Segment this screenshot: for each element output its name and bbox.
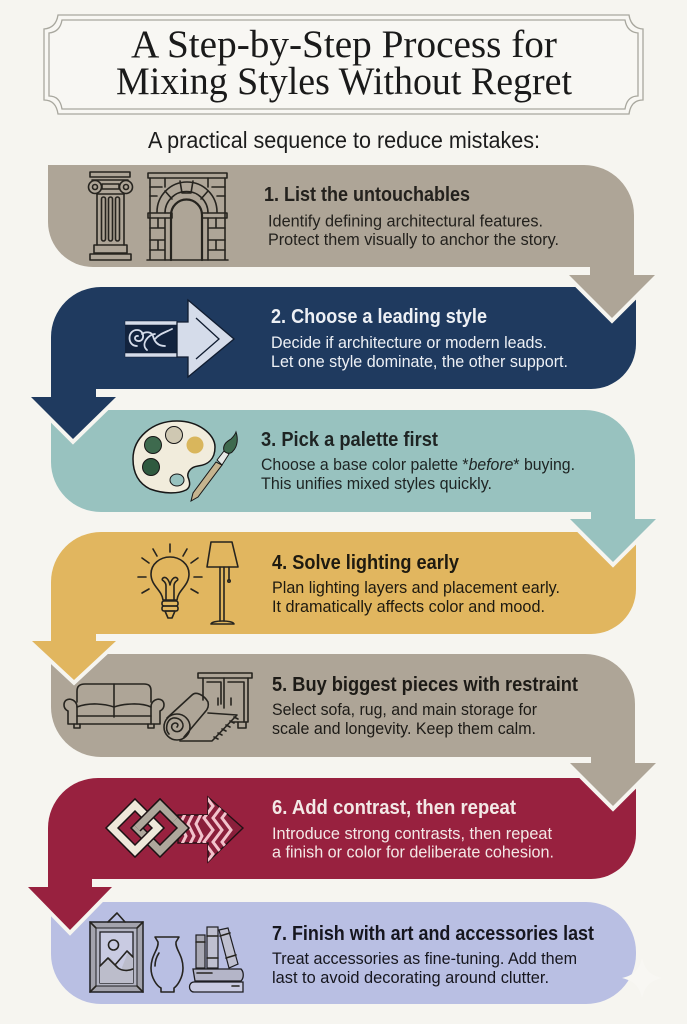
step 4 text: 4. Solve lighting early bbox=[272, 552, 460, 574]
title banner: Mixing Styles Without Regret bbox=[116, 60, 572, 103]
panel: step 4 bbox=[51, 532, 636, 634]
step 6 text: 6. Add contrast, then repeat bbox=[272, 797, 516, 819]
icon: ornament arrow bbox=[125, 300, 234, 377]
icon: wardrobe and rolled rug bbox=[164, 673, 252, 741]
title banner: A Step-by-Step Process for bbox=[131, 23, 557, 66]
step 6 text bbox=[272, 797, 554, 862]
icon: vase bbox=[151, 937, 183, 992]
panel: step 3 bbox=[51, 410, 635, 512]
step 1 text bbox=[264, 184, 559, 249]
step 7 text: 7. Finish with art and accessories last bbox=[272, 923, 594, 945]
step 5 text bbox=[272, 674, 578, 738]
step 7 text bbox=[272, 923, 594, 987]
subtitle: A practical sequence to reduce mistakes: bbox=[148, 127, 540, 153]
step 3 text: Choose a base color palette *before* buying. bbox=[261, 455, 575, 474]
arrow: step 6 to step 7 bbox=[28, 874, 112, 930]
step 7 text: Treat accessories as fine-tuning. Add them bbox=[272, 949, 577, 968]
icon: interlocked diamonds bbox=[112, 805, 183, 851]
icon: light bulb bbox=[138, 544, 202, 618]
arrow: step 3 to step 4 bbox=[570, 506, 656, 562]
step 1 text: Identify defining architectural features. bbox=[268, 212, 543, 230]
step 6 text: Introduce strong contrasts, then repeat bbox=[272, 824, 552, 843]
icon: chevron arrow bbox=[178, 794, 243, 866]
step 5 text: scale and longevity. Keep them calm. bbox=[272, 719, 536, 738]
icon: sofa bbox=[64, 684, 164, 728]
title banner bbox=[44, 15, 643, 114]
arrow: step 5 to step 6 bbox=[570, 750, 656, 806]
step 3 text bbox=[261, 429, 575, 493]
step 4 text bbox=[272, 552, 560, 616]
icon: floor lamp bbox=[207, 542, 238, 624]
step 5 text: 5. Buy biggest pieces with restraint bbox=[272, 674, 578, 696]
step 7 text: last to avoid decorating around clutter. bbox=[272, 968, 549, 987]
icon: stacked books bbox=[190, 927, 243, 992]
step 6 text: a finish or color for deliberate cohesion. bbox=[272, 842, 554, 862]
step 2 text bbox=[271, 306, 568, 371]
panel: step 1 bbox=[48, 165, 634, 267]
arrow: step 2 to step 3 bbox=[31, 384, 116, 439]
icon: sparkle watermark bbox=[622, 958, 662, 998]
step 2 text: Decide if architecture or modern leads. bbox=[271, 333, 547, 352]
icon: paint palette bbox=[133, 421, 237, 501]
step 4 text: Plan lighting layers and placement early. bbox=[272, 578, 560, 597]
panel: step 5 bbox=[51, 654, 635, 757]
step 1 text: Protect them visually to anchor the story. bbox=[268, 230, 559, 249]
step 4 text: It dramatically affects color and mood. bbox=[272, 597, 545, 616]
icon: framed picture bbox=[90, 913, 143, 992]
step 1 text: 1. List the untouchables bbox=[264, 184, 470, 206]
arrow: step 1 to step 2 bbox=[569, 262, 655, 318]
panel: step 7 bbox=[51, 902, 636, 1004]
icon: column bbox=[88, 172, 132, 260]
panel: step 2 bbox=[51, 287, 636, 389]
step 5 text: Select sofa, rug, and main storage for bbox=[272, 700, 537, 719]
arrow: step 4 to step 5 bbox=[32, 628, 116, 680]
step 3 text: This unifies mixed styles quickly. bbox=[261, 474, 492, 493]
step 2 text: 2. Choose a leading style bbox=[271, 306, 487, 328]
step 3 text: 3. Pick a palette first bbox=[261, 429, 438, 451]
icon: brick arch bbox=[147, 173, 228, 260]
step 2 text: Let one style dominate, the other support. bbox=[271, 352, 568, 371]
panel: step 6 bbox=[48, 778, 636, 879]
